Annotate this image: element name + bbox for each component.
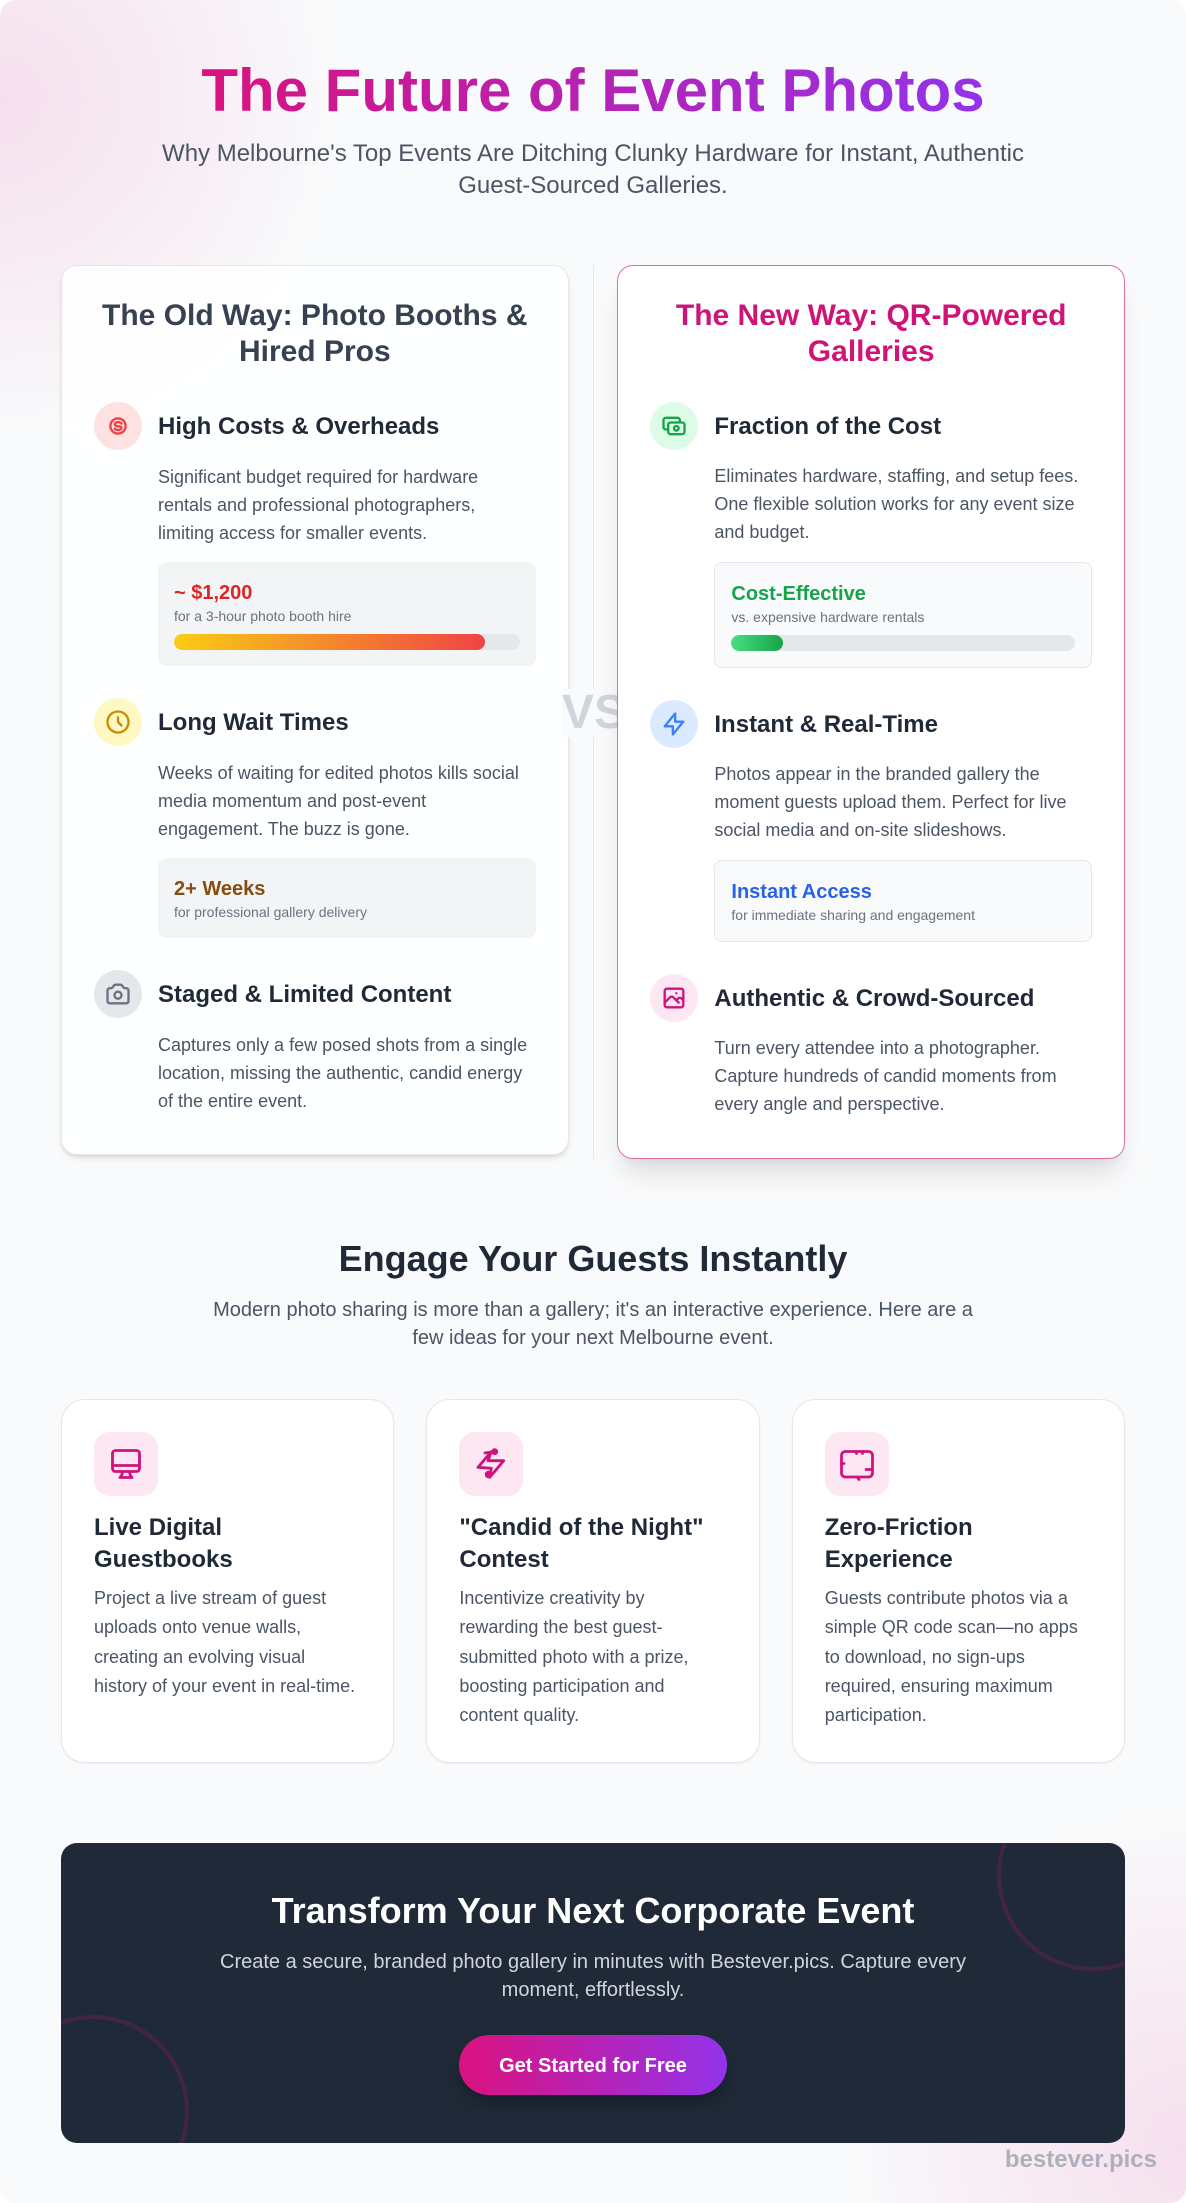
feature: instant: Photos appear in the branded gallery the moment guests upload them. Perfect for live social media and on-site slideshows. (714, 764, 1067, 840)
card: live digital guestbooks (61, 1399, 394, 1763)
feature: staged content: Staged & Limited Content (158, 980, 451, 1008)
stat: instant access: for immediate sharing and engagement (731, 907, 975, 923)
feature: wait times: Weeks of waiting for edited photos kills social media momentum and post-event engagement. The buzz is gone. (158, 763, 519, 839)
card: zero friction: Guests contribute photos via a simple QR code scan—no apps to download, no sign-ups required, ensuring maximum participation. (825, 1588, 1078, 1725)
card: candid contest (426, 1399, 760, 1763)
heading: old way: The Old Way: Photo Booths & Hired Pros (102, 299, 528, 368)
feature: wait times: Long Wait Times (158, 708, 349, 736)
icon: bolt (650, 700, 698, 748)
stat: weeks: 2+ Weeks (174, 878, 265, 900)
feature: authentic: Authentic & Crowd-Sourced (714, 984, 1034, 1012)
feature: high costs: High Costs & Overheads (158, 412, 439, 440)
icon: photo (650, 974, 698, 1022)
panel: the new way (617, 265, 1125, 1159)
engage subtitle: Modern photo sharing is more than a gallery; it's an interactive experience. Here are a few ideas for your next Melbourne event. (213, 1299, 973, 1349)
feature: fraction of cost: Eliminates hardware, staffing, and setup fees. One flexible solution works for any event size and budget. (714, 466, 1078, 542)
card: live digital guestbooks: Live Digital Guestbooks (94, 1514, 233, 1573)
panel: call to action (61, 1843, 1125, 2143)
feature: high costs: Significant budget required for hardware rentals and professional photographers, limiting access for smaller events. (158, 467, 478, 543)
panel: the old way (61, 265, 569, 1155)
icon: monitor (94, 1432, 158, 1496)
card: candid contest: Incentivize creativity by rewarding the best guest-submitted photo with a prize, boosting participation and content quality. (459, 1588, 689, 1725)
cta heading: Transform Your Next Corporate Event (272, 1890, 914, 1931)
feature: fraction of cost (650, 402, 1092, 668)
icon: dollar coin (94, 402, 142, 450)
cta text: Create a secure, branded photo gallery in minutes with Bestever.pics. Capture every moment, effortlessly. (220, 1951, 966, 2001)
feature: wait times (94, 698, 536, 938)
icon: camera (94, 970, 142, 1018)
stat: cost-effective: vs. expensive hardware rentals (731, 609, 924, 625)
feature: authentic: Turn every attendee into a photographer. Capture hundreds of candid moments from every angle and perspective. (714, 1038, 1057, 1114)
stat: cost-effective (714, 562, 1092, 668)
card: zero friction: Zero-Friction Experience (825, 1514, 973, 1573)
feature: staged content (94, 970, 527, 1111)
stat: cost: ~ $1,200 (174, 582, 252, 604)
watermark: bestever.pics (1005, 2146, 1157, 2173)
stat: weeks (158, 858, 536, 938)
icon: clock (94, 698, 142, 746)
card: live digital guestbooks: Project a live stream of guest uploads onto venue walls, creating an evolving visual history of your event in real-time. (94, 1588, 355, 1696)
card: zero friction (792, 1399, 1125, 1763)
feature: staged content: Captures only a few posed shots from a single location, missing the authentic, candid energy of the entire event. (158, 1035, 527, 1111)
stat: weeks: for professional gallery delivery (174, 904, 367, 920)
icon: scan frame (825, 1432, 889, 1496)
stat: instant access: Instant Access (731, 881, 872, 903)
icon: star bolt (459, 1432, 523, 1496)
stat: instant access (714, 860, 1092, 942)
title: The Future of Event Photos (201, 57, 985, 124)
stat: cost-effective: Cost-Effective (731, 583, 866, 605)
subtitle: Why Melbourne's Top Events Are Ditching Clunky Hardware for Instant, Authentic Guest-Sourced Galleries. (162, 140, 1024, 199)
heading: engage: Engage Your Guests Instantly (339, 1238, 847, 1279)
cta button: Get Started for Free (499, 2055, 687, 2077)
feature: instant: Instant & Real-Time (714, 710, 938, 738)
card: candid contest: "Candid of the Night" Contest (459, 1514, 703, 1573)
feature: fraction of cost: Fraction of the Cost (714, 412, 941, 440)
stat: cost (158, 562, 536, 666)
stat: cost: for a 3-hour photo booth hire (174, 608, 351, 624)
vs badge: VS (562, 686, 626, 739)
feature: instant (650, 700, 1092, 942)
cta button (459, 2035, 727, 2095)
feature: authentic (650, 974, 1057, 1114)
heading: new way: The New Way: QR-Powered Galleries (676, 299, 1066, 368)
feature: high costs (94, 402, 536, 666)
icon: cash (650, 402, 698, 450)
